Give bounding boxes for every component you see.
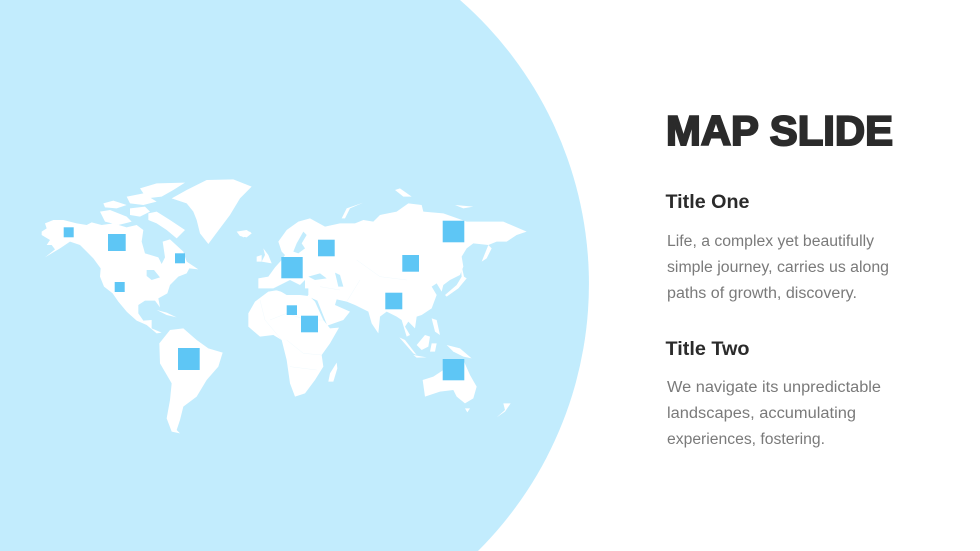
text block: first paragraph	[667, 233, 889, 302]
title: MAP SLIDE	[666, 107, 893, 154]
marker: South Asia	[385, 293, 402, 309]
text block: first paragraph: simple journey, carries us along	[667, 259, 889, 276]
marker: Australia	[443, 359, 464, 380]
marker: Eastern Russia	[443, 221, 464, 242]
text block: first paragraph: Life, a complex yet beautifully	[667, 233, 874, 250]
marker: Brazil	[178, 348, 200, 370]
text block: second paragraph	[667, 379, 881, 448]
text block: second paragraph: We navigate its unpredictable	[667, 379, 881, 396]
marker: Eastern Europe	[318, 240, 335, 256]
marker: Alaska	[64, 227, 74, 237]
heading: Title Two: Title Two	[666, 339, 750, 360]
marker: United States	[115, 282, 125, 292]
text block: second paragraph: landscapes, accumulating	[667, 405, 856, 422]
text block: second paragraph: experiences, fostering.	[667, 431, 825, 448]
marker: Quebec	[175, 253, 185, 263]
landmass: Americas	[42, 179, 252, 433]
text block: first paragraph: paths of growth, discovery.	[667, 285, 857, 302]
marker: North Africa	[287, 305, 297, 315]
marker: Central Asia	[402, 255, 419, 272]
heading: Title One: Title One	[666, 192, 750, 213]
background circle	[0, 0, 589, 551]
marker: Canada	[108, 234, 126, 251]
marker: Central Africa	[301, 316, 318, 332]
landmass: Europe, Asia, Africa, Oceania	[240, 188, 527, 417]
world map	[42, 179, 527, 433]
marker: Western Europe	[281, 257, 303, 278]
